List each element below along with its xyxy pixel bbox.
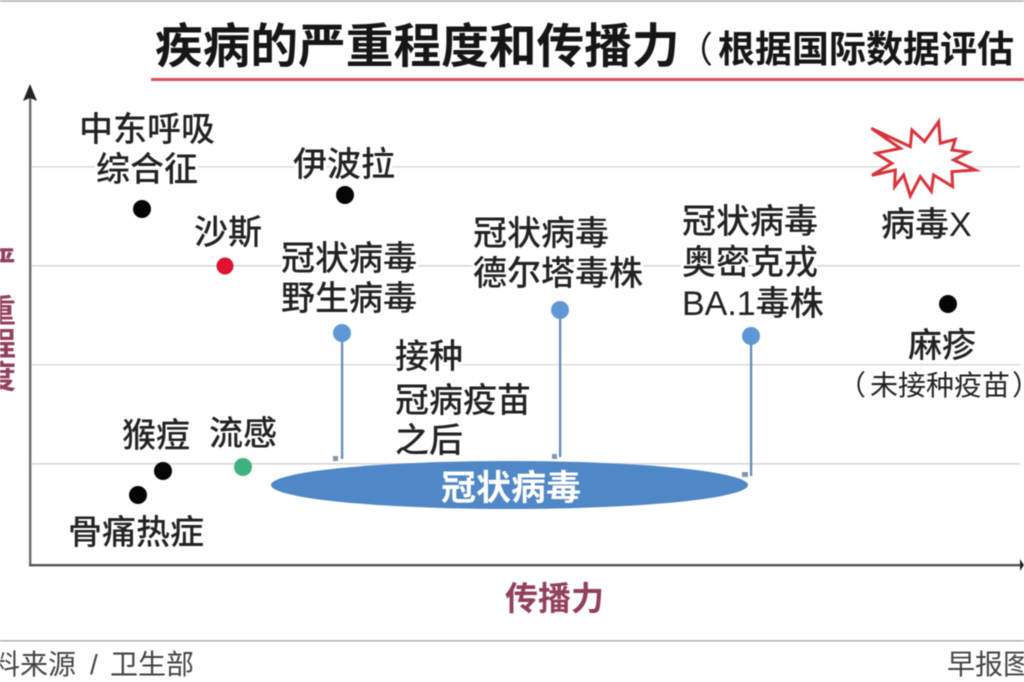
title <box>151 21 1024 81</box>
label: virus X: 病毒X <box>881 206 972 244</box>
x axis label: 传播力 <box>505 580 604 617</box>
dot: Ebola <box>336 186 354 204</box>
label: wild type coronavirus <box>281 240 417 318</box>
dot: SARS <box>216 258 234 274</box>
connector: wild type <box>333 324 351 461</box>
label: delta strain: 冠状病毒 <box>473 215 609 253</box>
label: measles unvaccinated: 未接种疫苗 <box>870 370 1010 401</box>
label: MERS: 综合征 <box>96 151 198 189</box>
x axis with arrow <box>29 559 1024 571</box>
dot: dengue <box>129 486 147 504</box>
label: dengue: 骨痛热症 <box>68 514 204 552</box>
label: MERS: 中东呼吸 <box>79 111 215 149</box>
title: （ <box>677 29 713 70</box>
dot: MERS <box>133 200 151 218</box>
y axis with arrow <box>23 84 37 566</box>
connector: delta <box>551 301 569 459</box>
source note: 卫生部 <box>110 649 194 680</box>
label: Ebola: 伊波拉 <box>293 146 395 184</box>
label: omicron BA.1 strain <box>682 203 824 323</box>
source note: / <box>90 649 98 680</box>
dot: monkeypox <box>154 462 172 480</box>
label: MERS <box>79 111 215 189</box>
label: measles unvaccinated: （ <box>838 370 866 401</box>
label: influenza: 流感 <box>209 415 277 453</box>
y axis label <box>0 245 16 395</box>
title: 疾病的严重程度和传播力 <box>155 21 680 74</box>
dot: measles <box>939 295 957 313</box>
label: after vaccination: 接种 <box>395 338 463 376</box>
dot: influenza <box>234 458 252 476</box>
icon: starburst for virus X <box>871 122 975 196</box>
label: omicron BA.1 strain: 奥密克戎 <box>682 244 818 282</box>
label: wild type coronavirus: 野生病毒 <box>281 280 417 318</box>
coronavirus ellipse: 冠状病毒 <box>441 469 581 508</box>
title: 根据国际数据评估 <box>718 29 1014 70</box>
source note <box>0 649 194 680</box>
label: omicron BA.1 strain: BA.1毒株 <box>682 285 824 323</box>
label: after vaccination: 冠病疫苗 <box>395 382 531 420</box>
label: delta strain: 德尔塔毒株 <box>473 255 643 293</box>
label: monkeypox: 猴痘 <box>122 417 190 455</box>
connector: omicron <box>742 327 760 477</box>
label: after vaccination <box>395 338 531 460</box>
coronavirus ellipse <box>271 461 748 509</box>
label: SARS: 沙斯 <box>194 214 262 252</box>
label: measles unvaccinated <box>838 327 1024 401</box>
label: measles unvaccinated: 麻疹 <box>908 327 976 365</box>
label: delta strain <box>473 215 643 293</box>
label: after vaccination: 之后 <box>395 422 463 460</box>
label: omicron BA.1 strain: 冠状病毒 <box>682 203 818 241</box>
label: wild type coronavirus: 冠状病毒 <box>281 240 417 278</box>
